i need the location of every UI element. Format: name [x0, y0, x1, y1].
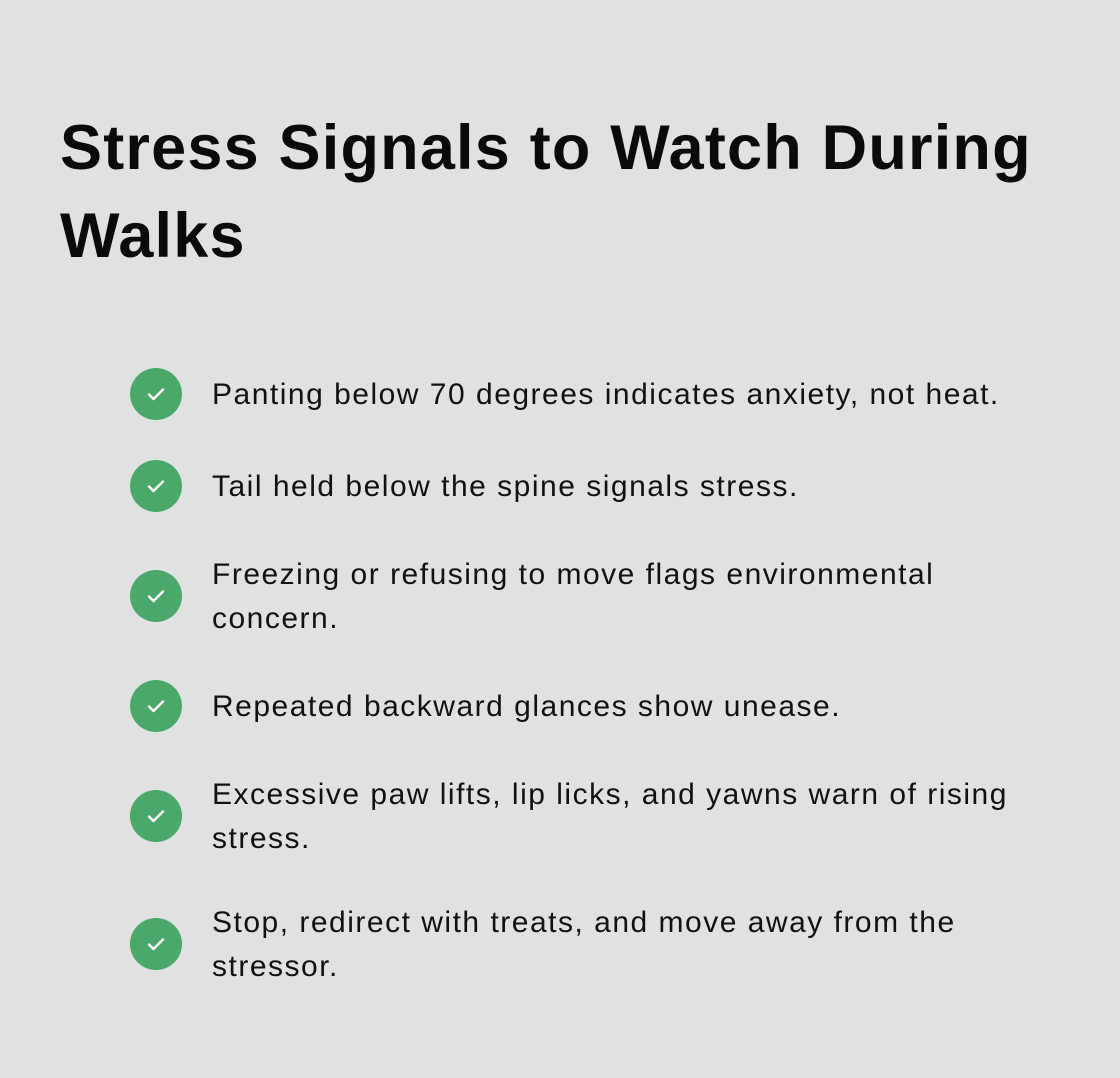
text: stress.: [212, 822, 311, 855]
item 1: [130, 368, 1000, 420]
item 4: [130, 680, 841, 732]
icon: check: [130, 790, 182, 842]
text: [212, 906, 956, 983]
text: stressor.: [212, 950, 339, 983]
title: [60, 113, 1032, 271]
text: Repeated backward glances show unease.: [212, 690, 841, 723]
icon: check: [130, 680, 182, 732]
item 5: [130, 778, 1008, 855]
text: [212, 778, 1008, 855]
text: concern.: [212, 602, 339, 635]
icon: check: [130, 368, 182, 420]
title: Stress Signals to Watch During: [60, 113, 1032, 183]
item 3: [130, 558, 934, 635]
item 6: [130, 906, 956, 983]
text: Excessive paw lifts, lip licks, and yawns warn of rising: [212, 778, 1008, 811]
text: Panting below 70 degrees indicates anxiety, not heat.: [212, 378, 1000, 411]
icon: check: [130, 570, 182, 622]
title: Walks: [60, 201, 246, 271]
icon: check: [130, 460, 182, 512]
text: Freezing or refusing to move flags environmental: [212, 558, 934, 591]
icon: check: [130, 918, 182, 970]
text: Tail held below the spine signals stress.: [212, 470, 799, 503]
text: [212, 558, 934, 635]
text: Stop, redirect with treats, and move away from the: [212, 906, 956, 939]
item 2: [130, 460, 799, 512]
